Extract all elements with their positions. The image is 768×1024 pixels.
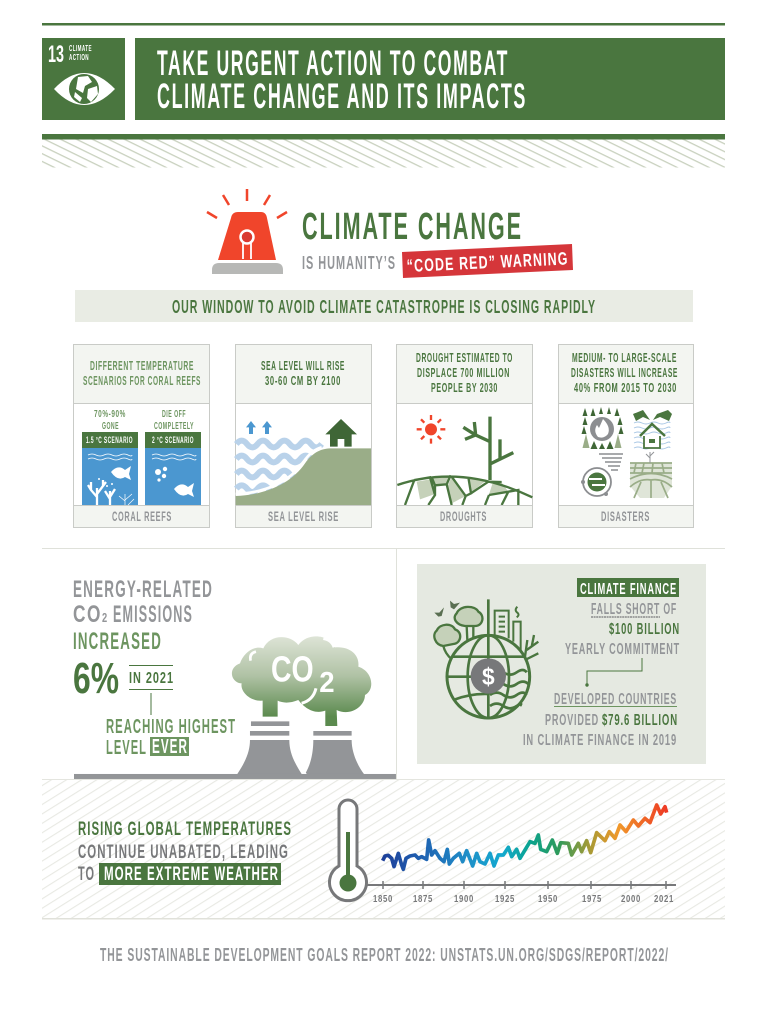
drought heading [416,351,513,395]
header [42,23,725,168]
drought illustration [397,415,532,505]
sea level heading: SEA LEVEL WILL RISE [261,359,345,373]
co2 text: 2 [102,610,108,625]
temperature text: RISING GLOBAL TEMPERATURES [78,819,292,840]
co2 text [73,576,236,759]
chart axis [364,881,676,905]
coral heading: DIFFERENT TEMPERATURE [90,359,194,373]
finance text: FALLS SHORT OF [591,601,677,618]
co2 text: EMISSIONS [113,601,193,628]
title banner [135,38,725,120]
panel: coral reefs [74,344,210,528]
disasters heading: 40% FROM 2015 TO 2030 [574,381,677,395]
sea level heading [261,359,345,388]
coral heading [83,359,201,388]
drought heading: DROUGHT ESTIMATED TO [416,351,513,365]
disasters heading: DISASTERS WILL INCREASE [571,366,678,380]
finance text [523,578,680,749]
drought footer: DROUGHTS [440,509,487,524]
co2 text: INCREASED [73,628,162,655]
drought heading: PEOPLE BY 2030 [431,381,498,395]
illustration: power plant [74,636,396,779]
panel: climate finance [417,564,706,764]
sea level footer: SEA LEVEL RISE [268,509,339,524]
1.5 degree scenario: GONE [102,421,119,432]
co2 text: 6% [73,654,119,703]
heading: climate change: CLIMATE CHANGE [302,206,523,248]
finance text: $79.6 BILLION [602,712,678,729]
chart axis: 2000 [621,893,641,905]
co2 text: ENERGY-RELATED [73,576,213,603]
finance text: $100 BILLION [609,621,680,638]
subheading: code red warning [302,244,573,278]
finance text: PROVIDED [545,712,599,729]
temperature text: MORE EXTREME WEATHER [104,864,279,885]
icon: thermometer [330,800,366,901]
drought heading: DISPLACE 700 MILLION [417,366,510,380]
2 degree scenario: DIE OFF [162,409,186,420]
SDG 13 badge: ACTION [69,53,89,62]
coral heading: SCENARIOS FOR CORAL REEFS [83,374,201,388]
chart axis: 1850 [373,893,393,905]
panel: droughts [396,344,532,528]
co2 text: IN 2021 [129,670,174,687]
finance text: YEARLY COMMITMENT [565,641,680,658]
chart axis: 2021 [654,893,674,905]
temperature text [78,819,292,885]
1.5 degree scenario [82,409,138,505]
co2 text: LEVEL [106,737,147,759]
sea level heading: 30-60 CM BY 2100 [265,374,341,388]
icon: flood [633,410,672,449]
finance text: CLIMATE FINANCE [580,581,677,598]
icon: wildfire [582,407,624,449]
2 degree scenario: COMPLETELY [154,421,194,432]
panel: rising temperatures [42,779,725,920]
banner: window closing [75,290,693,322]
1.5 degree scenario: 70%-90% [94,409,126,420]
1.5 degree scenario: 1.5 °C SCENARIO [86,435,133,446]
disasters heading: MEDIUM- TO LARGE-SCALE [572,351,677,365]
SDG 13 badge: 13 [48,41,64,68]
temperature text: TO [78,864,95,885]
icon: red siren [207,189,287,274]
illustration: power plant: CO [271,648,314,689]
co2 text: EVER [152,736,188,758]
chart axis: 1900 [454,893,474,905]
2 degree scenario: 2 °C SCENARIO [152,435,194,446]
2 degree scenario [145,409,201,505]
subheading: code red warning: “CODE RED” WARNING [406,248,569,276]
chart: global temperature line [364,805,676,905]
illustration: globe and finance [434,599,538,719]
coral footer: CORAL REEFS [112,509,172,524]
panel: co2 emissions [73,576,396,779]
subheading: code red warning: IS HUMANITY’S [302,253,396,273]
SDG 13 badge [42,38,125,120]
chart axis: 1925 [495,893,515,905]
illustration: power plant: 2 [319,667,335,699]
panel: sea level [236,344,372,528]
chart axis: 1875 [413,893,433,905]
co2 text: REACHING HIGHEST [106,716,236,738]
disasters footer: DISASTERS [601,509,650,524]
chart axis: 1975 [582,893,602,905]
disasters heading [571,351,678,395]
illustration: globe and finance: $ [482,664,495,691]
SDG 13 badge: CLIMATE [69,44,92,53]
sea level illustration [236,419,371,505]
co2 text: CO [73,601,102,628]
chart axis: 1950 [538,893,558,905]
icon: cracked land [630,452,672,498]
panel: disasters [558,344,694,528]
temperature line [383,805,667,869]
icon: tornado and cyclone [581,454,623,496]
temperature text: CONTINUE UNABATED, LEADING [78,842,289,863]
